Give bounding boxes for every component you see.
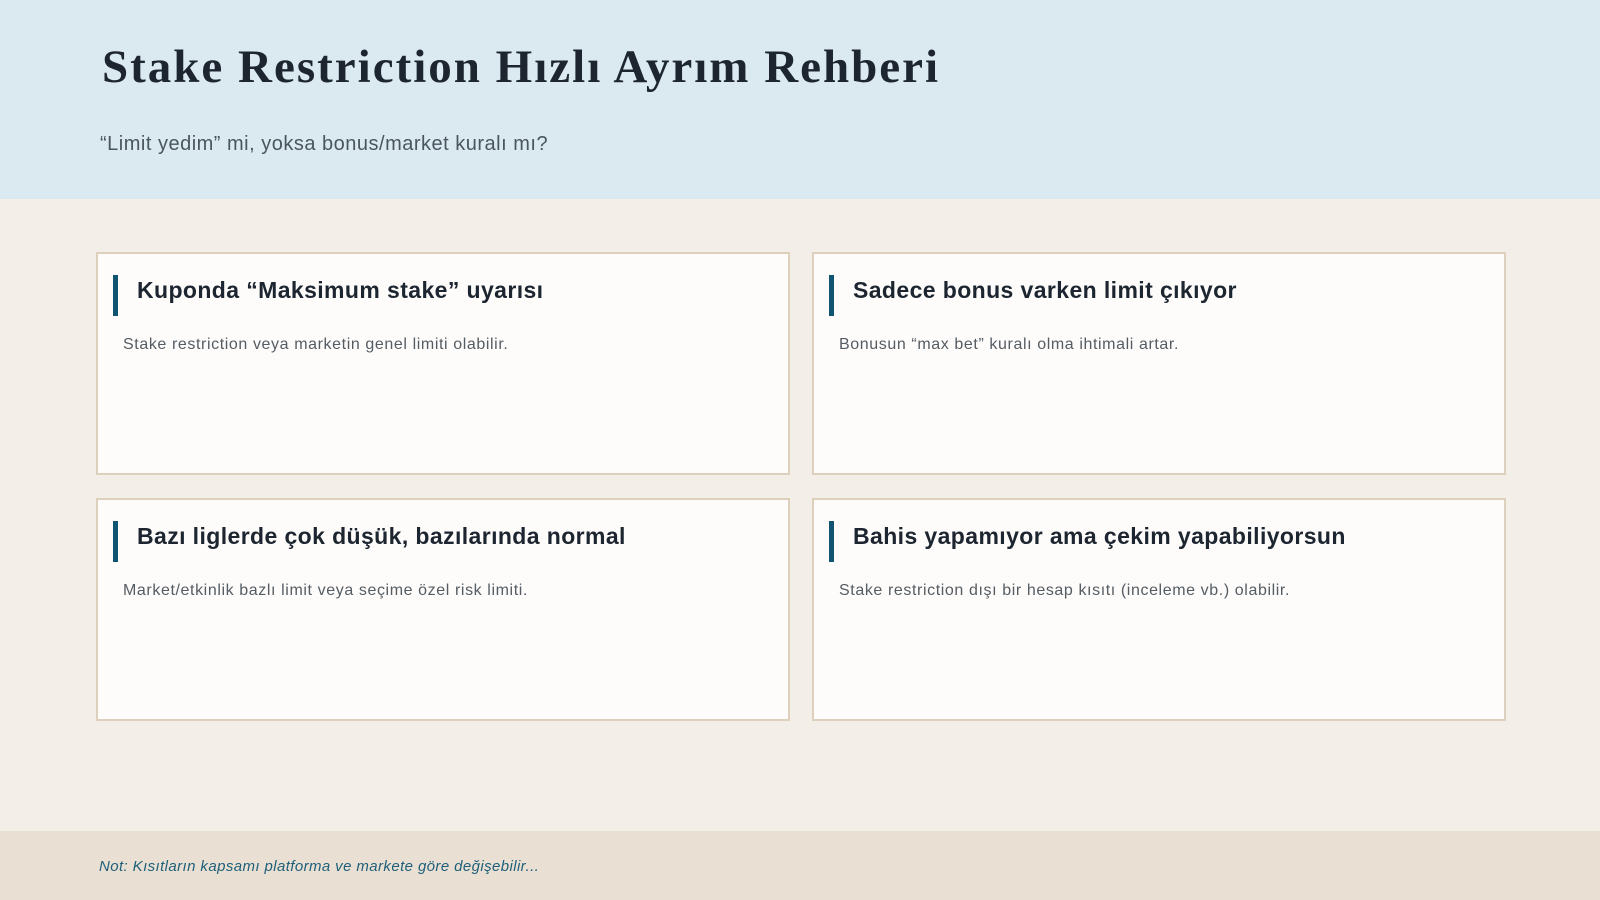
- panel: çekim: [812, 498, 1506, 721]
- panel: ligler: [96, 498, 790, 721]
- body text: Bonusun “max bet” kuralı olma ihtimali artar.: [839, 336, 1179, 353]
- heading: Bazı liglerde çok düşük, bazılarında normal: [137, 523, 626, 549]
- accent bar: [113, 521, 118, 562]
- panel: bonus: [812, 252, 1506, 475]
- panel: maksimum stake: [96, 252, 790, 475]
- footer: [0, 831, 1600, 900]
- accent bar: [829, 521, 834, 562]
- body text: Market/etkinlik bazlı limit veya seçime özel risk limiti.: [123, 582, 528, 599]
- header band: [0, 0, 1600, 199]
- heading: Kuponda “Maksimum stake” uyarısı: [137, 277, 543, 303]
- body text: Stake restriction veya marketin genel limiti olabilir.: [123, 336, 508, 353]
- accent bar: [829, 275, 834, 316]
- subtitle: “Limit yedim” mi, yoksa bonus/market kuralı mı?: [100, 133, 548, 155]
- heading: Sadece bonus varken limit çıkıyor: [853, 277, 1237, 303]
- body text: Stake restriction dışı bir hesap kısıtı (inceleme vb.) olabilir.: [839, 582, 1290, 599]
- title: Stake Restriction Hızlı Ayrım Rehberi: [102, 41, 940, 93]
- heading: Bahis yapamıyor ama çekim yapabiliyorsun: [853, 523, 1346, 549]
- footer note: Not: Kısıtların kapsamı platforma ve markete göre değişebilir...: [99, 858, 539, 875]
- accent bar: [113, 275, 118, 316]
